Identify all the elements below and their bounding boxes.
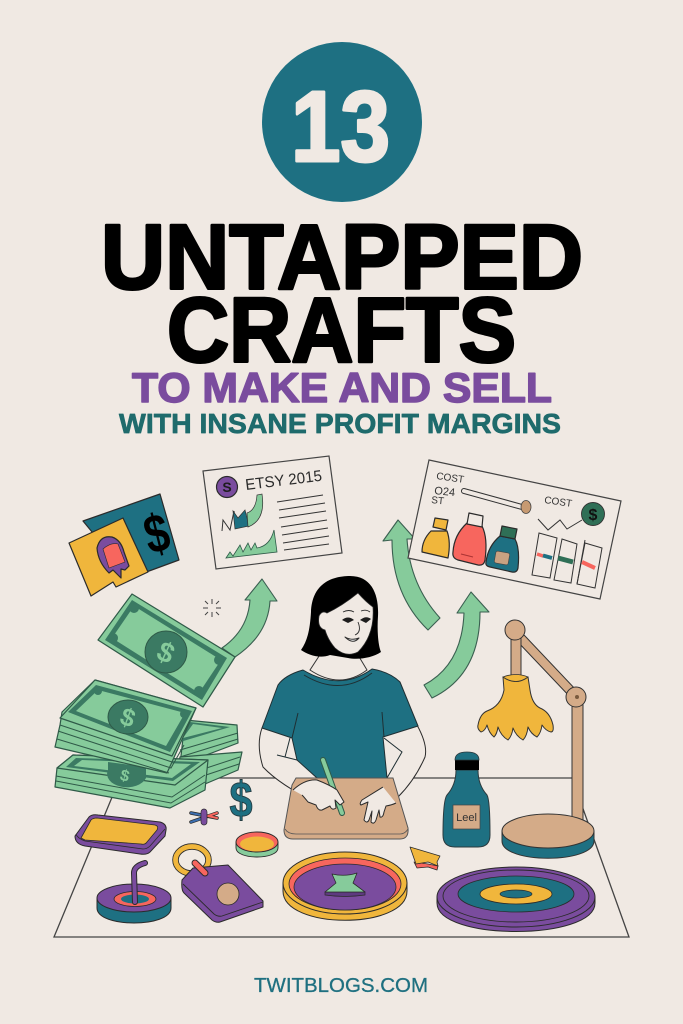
flying banknote: $ bbox=[152, 635, 180, 670]
lower chart bbox=[226, 530, 277, 558]
face bbox=[319, 593, 373, 654]
purple tag bbox=[176, 846, 263, 922]
glue bottle: Leel bbox=[456, 812, 477, 824]
smile bbox=[345, 637, 359, 641]
desk lamp bbox=[478, 620, 594, 858]
neck bbox=[310, 650, 367, 680]
ring disc with stick bbox=[97, 863, 171, 923]
lamp shade bbox=[478, 677, 553, 740]
title: crafts: CRAFTS bbox=[167, 280, 516, 382]
front bundle lower bbox=[55, 755, 208, 808]
folded scrap bbox=[410, 847, 440, 870]
back bundle upper bbox=[180, 720, 238, 765]
report sheet: cost bbox=[408, 460, 621, 599]
sparkle bbox=[203, 599, 221, 617]
lamp base bbox=[502, 814, 594, 858]
cost labels: ST bbox=[431, 495, 445, 507]
woman bbox=[259, 576, 426, 822]
title: untapped: UNTAPPED bbox=[101, 206, 583, 308]
glue bottle bbox=[443, 752, 490, 847]
front bundle upper: $ bbox=[116, 702, 139, 734]
teal dollar sign: $ bbox=[230, 772, 253, 828]
arms bbox=[259, 725, 426, 822]
teal shirt bbox=[262, 669, 418, 778]
back bundle lower bbox=[172, 752, 242, 798]
lamp post bbox=[572, 700, 583, 825]
footer url: TWITBLOGS.COM bbox=[254, 974, 428, 997]
cost labels: O24 bbox=[434, 485, 456, 499]
lamp top ball bbox=[505, 620, 525, 640]
banknote stacks bbox=[55, 680, 242, 808]
central plate bbox=[283, 852, 407, 920]
arrow: up left bbox=[383, 520, 440, 630]
lamp arm bbox=[516, 631, 578, 699]
front bundle upper bbox=[55, 680, 196, 773]
icon: green coin: $ bbox=[589, 507, 598, 524]
lamp stem bbox=[511, 638, 521, 682]
subtitle: with insane profit margins: WITH INSANE PROFIT MARGINS bbox=[119, 408, 561, 439]
brows and nose bbox=[343, 610, 370, 635]
cost labels bbox=[431, 471, 573, 510]
cutting board bbox=[284, 778, 408, 839]
pencil bbox=[323, 760, 342, 813]
arrow: up right bbox=[424, 592, 489, 698]
coral bottle bbox=[453, 513, 486, 565]
hair bbox=[301, 576, 381, 659]
product cards bbox=[69, 494, 179, 596]
teal bottle bbox=[486, 526, 519, 572]
sheet heading: ETSY 2015 bbox=[244, 468, 323, 494]
cost labels: COST bbox=[436, 471, 465, 486]
yellow portrait card bbox=[69, 518, 148, 596]
eyes bbox=[342, 617, 371, 623]
concentric plate bbox=[437, 867, 595, 932]
number badge: 13 bbox=[291, 71, 390, 183]
teal dollar card: $ bbox=[138, 502, 176, 566]
subtitle: to make and sell: TO MAKE AND SELL bbox=[132, 364, 552, 411]
sheet lines bbox=[277, 495, 329, 550]
small bead cluster bbox=[191, 809, 217, 825]
collar and creases bbox=[277, 673, 402, 778]
number badge bbox=[262, 42, 422, 202]
icon: purple coin: S bbox=[222, 479, 232, 495]
front bundle lower: $ bbox=[118, 767, 131, 786]
flying banknote bbox=[98, 594, 235, 707]
lamp joint bbox=[566, 687, 586, 707]
trend line bbox=[538, 519, 582, 530]
pencil fill bbox=[323, 760, 342, 813]
yellow bottle bbox=[422, 518, 449, 558]
bar panels bbox=[532, 533, 602, 588]
cost labels: COST bbox=[544, 495, 573, 510]
slider bar bbox=[464, 491, 531, 514]
left hand bbox=[293, 780, 344, 810]
report sheet: etsy bbox=[203, 456, 342, 569]
purple tray bbox=[75, 815, 166, 854]
icon: green coin bbox=[582, 502, 604, 526]
upper chart bbox=[222, 494, 263, 531]
small round dish bbox=[236, 832, 278, 857]
shade collar bbox=[503, 674, 528, 682]
arrow: money to report bbox=[222, 579, 277, 657]
craft table bbox=[54, 778, 629, 937]
right hand bbox=[360, 787, 396, 823]
